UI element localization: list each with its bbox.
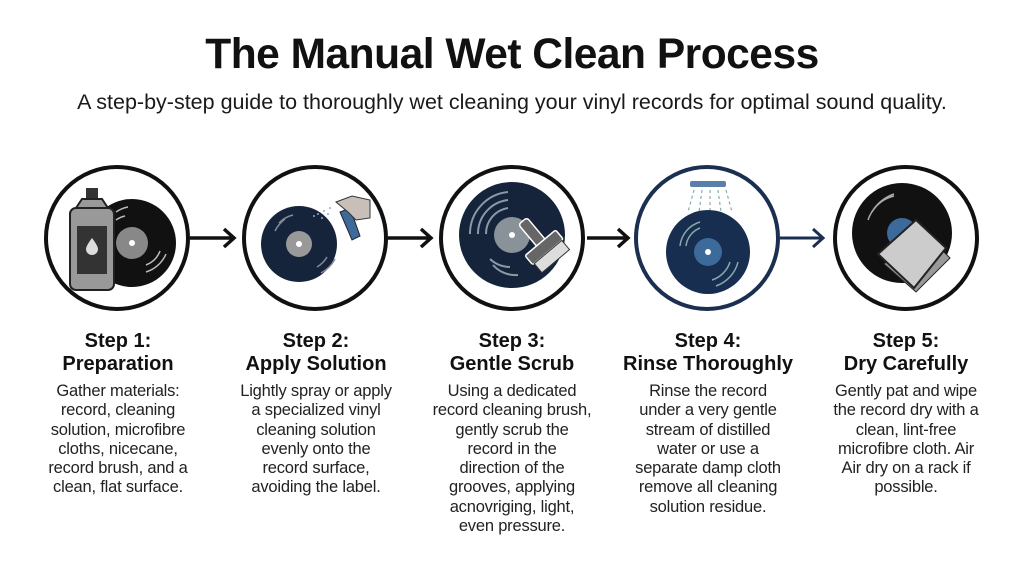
step 2: Step 2:: [283, 330, 349, 352]
step 5: the record dry with a: [833, 401, 979, 419]
step 1: Preparation: [62, 353, 174, 375]
arrow 4: [780, 229, 823, 247]
step 5: Dry Carefully: [844, 353, 968, 375]
step 3: direction of the: [459, 459, 565, 477]
step 1: Gather materials:: [56, 382, 180, 400]
arrow 1: [190, 229, 234, 247]
step 5: microfibre cloth. Air: [838, 440, 974, 458]
step 3: Gentle Scrub: [450, 353, 574, 375]
step 4: solution residue.: [650, 498, 766, 516]
step 2: avoiding the label.: [251, 478, 381, 496]
step 3: even pressure.: [459, 517, 565, 535]
icon: step 2 spray: [244, 167, 386, 309]
step 4: water or use a: [657, 440, 759, 458]
subtitle: A step-by-step guide to thoroughly wet cleaning your vinyl records for optimal sound quality.: [77, 90, 947, 114]
icons and arrows: [44, 165, 979, 311]
step 4: Rinse the record: [649, 382, 767, 400]
step 5: Gently pat and wipe: [835, 382, 977, 400]
step 4: stream of distilled: [646, 421, 770, 439]
step 2: a specialized vinyl: [251, 401, 381, 419]
step 3: Using a dedicated: [448, 382, 576, 400]
icon: step 5 dry cloth: [835, 167, 977, 309]
step 1: solution, microfibre: [51, 421, 185, 439]
step 2: evenly onto the: [262, 440, 370, 458]
step 4: remove all cleaning: [639, 478, 777, 496]
step 5: clean, lint-free: [856, 421, 956, 439]
step 4: Rinse Thoroughly: [623, 353, 793, 375]
step 3: grooves, applying: [449, 478, 575, 496]
step 5: Step 5:: [873, 330, 939, 352]
step 3: record in the: [467, 440, 557, 458]
step 1: cloths, nicecane,: [58, 440, 178, 458]
step 3: gently scrub the: [455, 421, 569, 439]
arrow 2: [388, 229, 431, 247]
step 4: Step 4:: [675, 330, 741, 352]
step 3: Step 3:: [479, 330, 545, 352]
step 2: cleaning solution: [256, 421, 376, 439]
step 3: [433, 330, 591, 535]
step 2: record surface,: [262, 459, 370, 477]
step 2: Lightly spray or apply: [240, 382, 392, 400]
step 3: acnovriging, light,: [450, 498, 574, 516]
icon: step 1 bottle and record: [46, 167, 188, 309]
step 5: [833, 330, 979, 496]
step 4: under a very gentle: [639, 401, 777, 419]
step 2: [240, 330, 392, 496]
step 3: record cleaning brush,: [433, 401, 591, 419]
icon: step 4 rinse: [636, 167, 778, 309]
step 1: clean, flat surface.: [53, 478, 183, 496]
step 1: [48, 330, 188, 496]
step 1: record brush, and a: [48, 459, 188, 477]
step 5: possible.: [874, 478, 938, 496]
arrow 3: [587, 229, 628, 247]
step 4: [623, 330, 793, 516]
step 1: record, cleaning: [61, 401, 175, 419]
icon: step 3 brush: [441, 167, 583, 309]
step 4: separate damp cloth: [635, 459, 781, 477]
step 1: Step 1:: [85, 330, 151, 352]
title: The Manual Wet Clean Process: [205, 31, 819, 78]
step 5: Air dry on a rack if: [842, 459, 970, 477]
step 2: Apply Solution: [245, 353, 387, 375]
